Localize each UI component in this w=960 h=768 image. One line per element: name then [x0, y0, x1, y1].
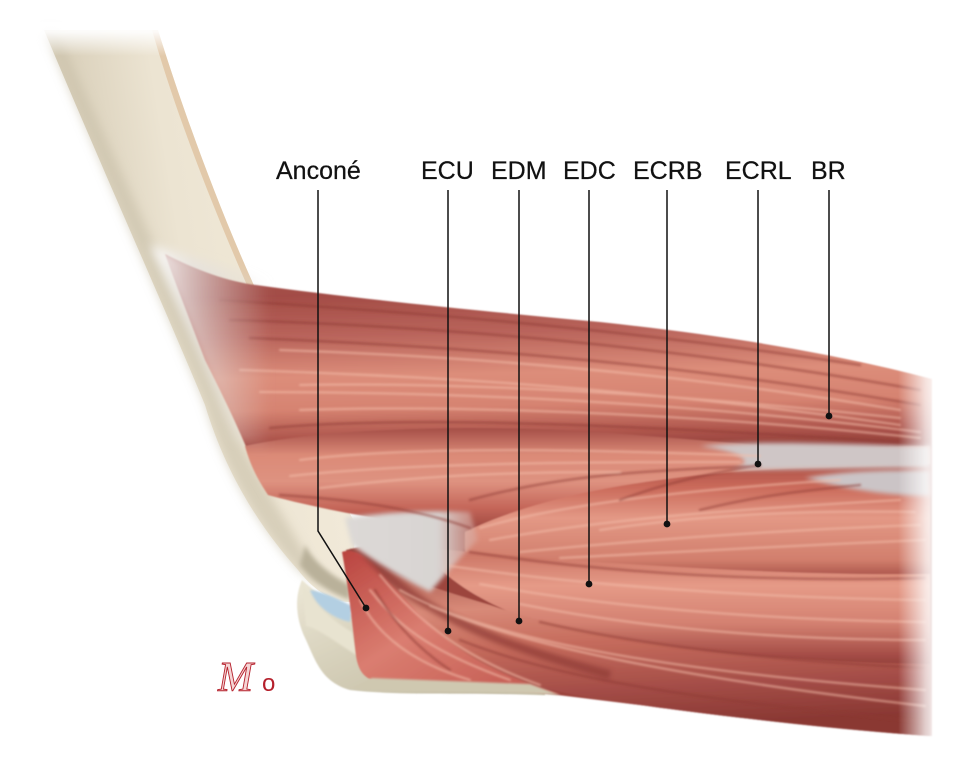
tendon: ECRB grey	[805, 470, 930, 496]
label: ECRB: ECRB	[633, 157, 702, 185]
muscle: EDC band	[425, 548, 930, 674]
ulna lower edge	[352, 678, 560, 695]
muscle fibres	[220, 300, 925, 722]
label: ECRB	[633, 157, 702, 527]
right fade	[898, 350, 940, 750]
muscle: ECRL band	[245, 428, 930, 535]
muscle: anconeus	[342, 551, 560, 694]
label: ECU: ECU	[421, 157, 474, 185]
joint cartilage	[310, 590, 352, 622]
humerus bone	[30, 22, 356, 602]
tendon: ECRL grey	[700, 443, 930, 470]
label: ECRL: ECRL	[725, 157, 792, 185]
muscle: ECU band	[350, 548, 930, 736]
muscle groove	[365, 552, 610, 675]
label: EDC	[563, 157, 616, 587]
label: Anconé: Anconé	[276, 157, 361, 185]
label: Anconé	[276, 157, 369, 611]
ulna bone	[297, 580, 545, 695]
muscle: base layer	[255, 420, 932, 736]
signature: o	[262, 670, 275, 697]
signature: M	[217, 655, 255, 701]
label: ECRL	[725, 157, 792, 467]
olecranon rim	[302, 582, 358, 656]
muscle: ECRB band	[465, 464, 930, 584]
label: EDC: EDC	[563, 157, 616, 185]
label: ECU	[421, 157, 474, 634]
label: EDM: EDM	[491, 157, 547, 185]
label: EDM	[491, 157, 547, 624]
muscle mass	[165, 254, 932, 736]
left fade of upper muscle	[150, 245, 270, 450]
muscle: BR upper band	[165, 254, 932, 456]
label: BR	[811, 157, 846, 419]
aponeurosis: grey tendon	[345, 511, 478, 592]
label: BR: BR	[811, 157, 846, 185]
signature	[217, 655, 275, 701]
